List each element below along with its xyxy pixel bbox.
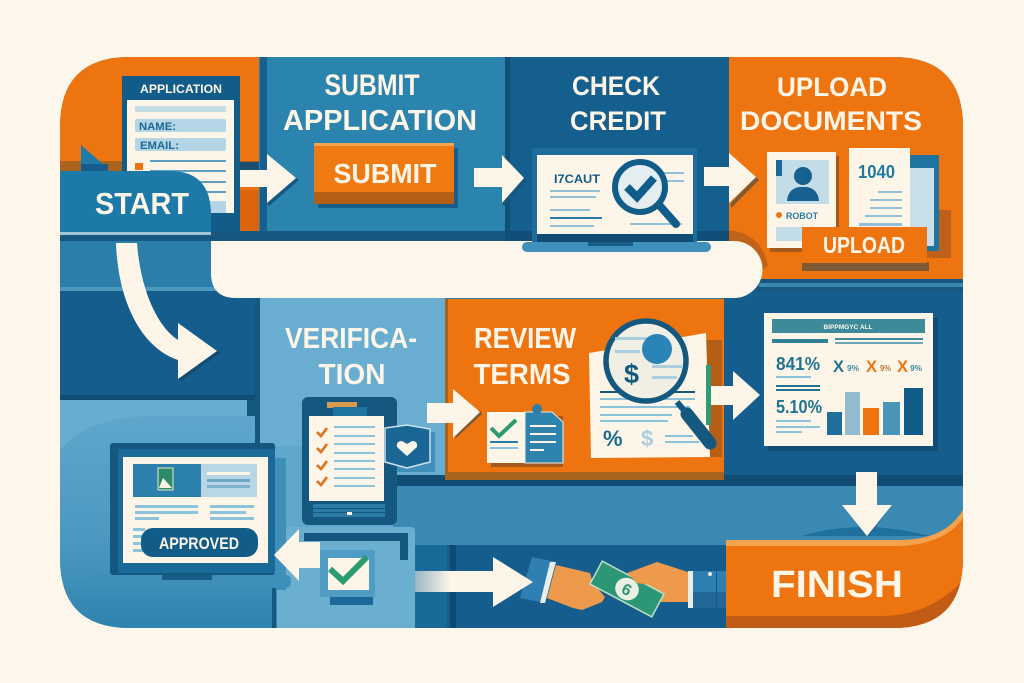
heading: check credit [571, 76, 666, 130]
arrow: verification to review [427, 389, 482, 438]
pill: approved [141, 528, 258, 557]
badge: start [60, 145, 211, 239]
flowchart board [60, 57, 963, 628]
icon: hands exchanging money [520, 557, 726, 617]
icon: laptop with credit report [522, 148, 711, 252]
arrow: start to verification [116, 243, 220, 381]
heading: review terms [474, 328, 576, 384]
checklist lines [334, 426, 375, 487]
card header: BIPPMGYC ALL [824, 324, 873, 331]
icon: magnifier with check [615, 162, 676, 224]
panel: application form: APPLICATION [140, 82, 222, 96]
panel: middle band [393, 486, 963, 545]
icon: checklist marks [317, 428, 327, 485]
icon: heart badge [385, 425, 435, 472]
icon: review document: $ [641, 426, 653, 451]
heading: upload documents: UPLOAD [777, 72, 887, 102]
button: upload: UPLOAD [823, 232, 905, 258]
panel: results dashboard [393, 291, 963, 486]
panel: submit application [60, 57, 505, 241]
icon: form 1040 document: 1040 [858, 162, 895, 182]
heading: submit application: APPLICATION [283, 105, 477, 137]
heading: verification [285, 328, 416, 384]
marks row: X [897, 357, 909, 376]
panel: application form [60, 57, 260, 241]
icon: review document [589, 321, 722, 458]
button: submit: SUBMIT [334, 158, 436, 189]
panel: finish [726, 510, 963, 628]
heading: upload documents [742, 77, 921, 130]
heading: finish: FINISH [771, 564, 903, 606]
panel: check credit [505, 57, 729, 241]
arrow: credit to upload [704, 153, 759, 208]
pill: approved: APPROVED [159, 534, 239, 553]
icon: clipboard checklist tablet [302, 397, 435, 525]
heading: verification: VERIFICA- [285, 323, 417, 355]
panel: left connector strip [60, 287, 255, 400]
panel: upload documents [729, 57, 963, 301]
marks row: X [833, 357, 845, 376]
results card [764, 313, 938, 451]
right hand palm [640, 562, 688, 602]
icon: signed clipboard [487, 404, 563, 467]
heading: review terms: TERMS [474, 359, 570, 391]
icon: laptop approved [93, 443, 291, 628]
left hand [547, 565, 605, 610]
left sleeve [520, 557, 556, 603]
heading: review terms: REVIEW [474, 323, 577, 355]
panel: payout strip [415, 545, 726, 628]
icon: review magnifier: $ [624, 359, 639, 389]
approval image [133, 464, 257, 497]
panel: approved area [60, 400, 393, 628]
bar chart [827, 388, 923, 435]
arrow: results to finish [842, 472, 892, 536]
badge: start: START [95, 186, 189, 221]
icon: approval check folder [277, 527, 415, 628]
marks row: 9% [880, 364, 891, 373]
panel: verification [255, 298, 445, 475]
icon: form 1040 document [849, 148, 951, 258]
stat: 5.10 percent: 5.10% [776, 397, 822, 417]
marks row: 9% [847, 364, 859, 373]
icon: photo id document: ROBOT [786, 211, 818, 222]
heading: submit application: SUBMIT [324, 69, 420, 102]
heading: check credit: CREDIT [570, 106, 666, 136]
right hand thumb [627, 562, 665, 585]
white notch [211, 241, 762, 298]
right sleeve [688, 571, 726, 608]
heading: check credit: CHECK [572, 71, 660, 101]
banknote: 6 [618, 581, 634, 600]
card header [772, 319, 925, 333]
screen lines [133, 505, 254, 552]
icon: photo id document [767, 152, 839, 252]
marks row: 9% [910, 364, 922, 373]
button: submit [314, 143, 458, 208]
arrow: check to approved [274, 529, 320, 581]
arrow: form to submit [240, 154, 299, 206]
heading: submit application [284, 74, 476, 130]
button: upload [802, 227, 929, 271]
heading: verification: TION [318, 359, 386, 391]
arrow: review to results [711, 371, 760, 420]
marks row [833, 357, 922, 376]
arrow: check to payment [415, 557, 533, 607]
banknote [590, 561, 664, 617]
icon: laptop with credit report: I7CAUT [554, 174, 600, 186]
marks row: X [866, 357, 878, 376]
heading: upload documents: DOCUMENTS [740, 106, 922, 136]
panel: application form: NAME: [139, 121, 176, 133]
stat: 841 percent: 841% [776, 354, 820, 374]
arrow: submit to credit [474, 155, 527, 206]
panel: review terms [445, 299, 724, 480]
icon: review document: % [603, 426, 623, 451]
panel: application form: EMAIL: [140, 140, 179, 152]
